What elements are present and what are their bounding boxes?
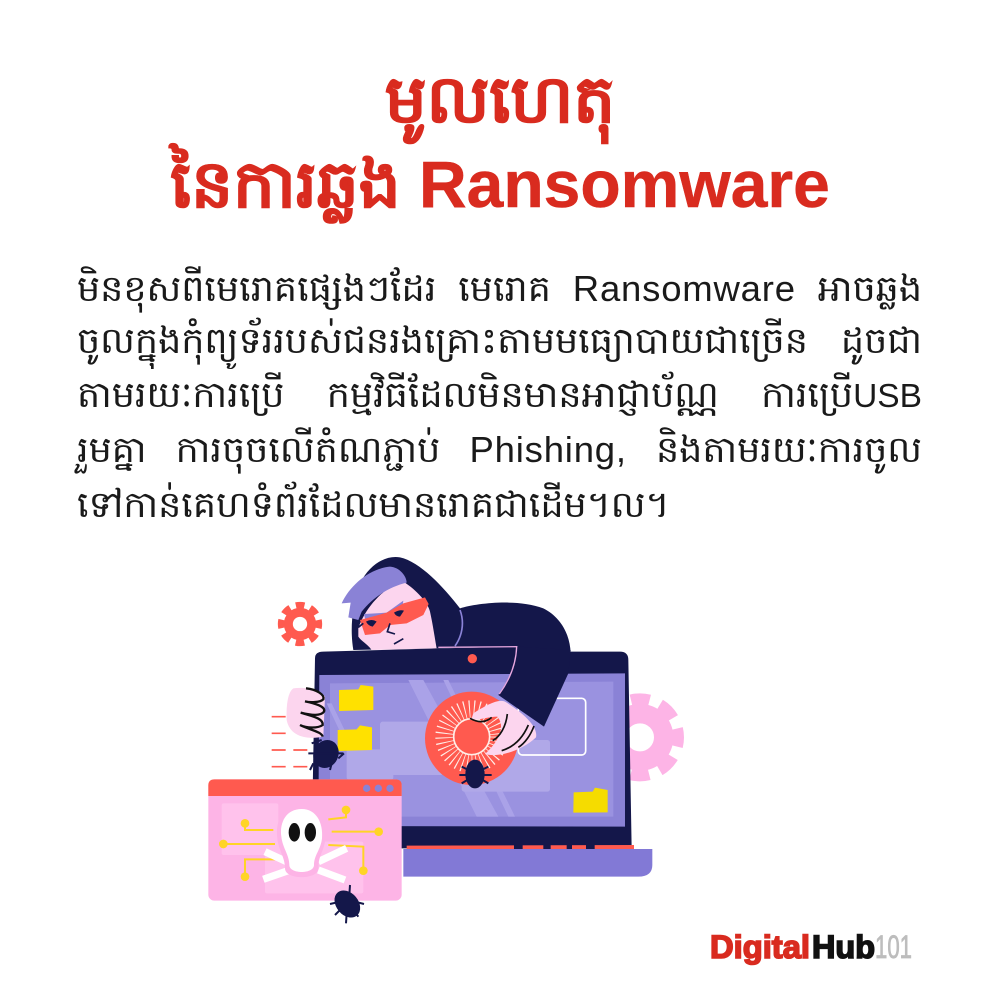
icon: bug on burst <box>459 761 492 787</box>
title line 2: នៃការឆ្លង Ransomware <box>170 147 830 221</box>
arm sleeve over screen <box>438 647 571 727</box>
skull and crossbones <box>263 805 347 880</box>
left hand gripping laptop <box>287 688 325 738</box>
icon: folder 3 <box>573 788 608 813</box>
icon: folder 1 <box>339 685 373 711</box>
logo: DigitalHub101: 101 <box>875 929 912 965</box>
body paragraph: តាមរយៈការប្រើ កម្មវិធីដែលមិនមានអាជ្ញាប័ណ្ណ ការប្រើUSB <box>77 374 922 415</box>
motion dashes <box>272 717 307 767</box>
hand on circle <box>470 701 536 755</box>
icon: bug on laptop edge <box>308 737 344 771</box>
logo: DigitalHub101 <box>710 929 912 965</box>
logo: DigitalHub101: Digital <box>710 929 810 965</box>
icon: pink gear <box>603 700 677 775</box>
panel: pink skull window <box>208 779 402 901</box>
hacker figure <box>342 557 571 727</box>
circuit traces <box>219 806 383 881</box>
icon: bug on window <box>330 885 364 923</box>
virus burst circle <box>425 692 518 785</box>
body paragraph: មិនខុសពីមេរោគផ្សេងៗដែរ មេរោគ Ransomware អាចឆ្លង <box>77 268 922 309</box>
icon: red gear <box>281 605 319 643</box>
title line 1: មូលហេតុ <box>385 62 615 136</box>
title <box>168 62 830 224</box>
laptop <box>312 647 652 877</box>
body paragraph <box>74 266 922 525</box>
body paragraph: ទៅកាន់គេហទំព័រដែលមានរោគជាដើម។ល។ <box>77 484 670 525</box>
illustration: hacker with laptop <box>208 557 677 923</box>
icon: folder 2 <box>338 725 372 751</box>
body paragraph: ចូលក្នុងកុំព្យូទ័ររបស់ជនរងគ្រោះតាមមធ្យោបាយជាច្រើន ដូចជា <box>77 320 922 361</box>
logo: DigitalHub101: Hub <box>812 929 875 965</box>
body paragraph: រួមគ្នា ការចុចលើតំណភ្ជាប់ Phishing, និងតាមរយៈការចូល <box>77 429 922 470</box>
